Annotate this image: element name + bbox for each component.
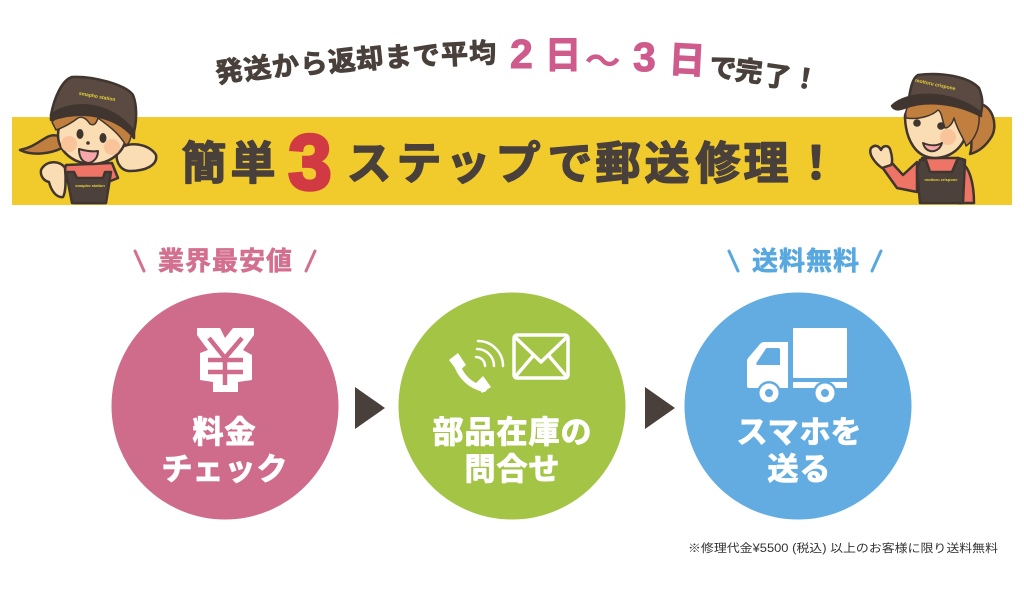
step 2 text: 部品在庫の xyxy=(432,407,592,452)
step 3 text: スマホを xyxy=(736,407,862,452)
cap xyxy=(51,77,136,132)
subtitle: curved text: 日 xyxy=(667,29,707,85)
ponytail xyxy=(970,104,994,154)
character: right staff xyxy=(870,74,994,203)
arrow 1 xyxy=(355,387,385,429)
banner background xyxy=(12,117,1012,205)
hair xyxy=(906,98,979,146)
subtitle: curved text: ～ xyxy=(583,32,622,86)
face xyxy=(58,106,126,164)
character: left staff xyxy=(20,77,156,203)
panel: step 1 price check: チェック xyxy=(162,444,288,489)
icon: envelope xyxy=(514,335,568,378)
body xyxy=(62,163,118,203)
mouth xyxy=(923,143,942,151)
hair xyxy=(52,114,132,144)
ponytail xyxy=(20,135,62,154)
icon: yen xyxy=(197,328,254,392)
cap xyxy=(908,74,982,113)
subtitle: curved text: 3 xyxy=(633,34,656,80)
panel: step 2 parts inquiry xyxy=(398,292,626,520)
mouth xyxy=(79,149,98,163)
subtitle: curved text: で完了！ xyxy=(708,45,822,98)
cheeks xyxy=(61,136,120,155)
cheek xyxy=(940,129,956,145)
icon: truck xyxy=(747,328,847,405)
eyes xyxy=(913,119,945,130)
step 1 text: 料金 xyxy=(192,407,256,452)
subtitle: curved text: 日 xyxy=(544,25,582,79)
apron logo: mottoru crispone xyxy=(925,177,958,182)
face xyxy=(905,101,967,158)
apron logo: smapho station xyxy=(75,183,105,188)
panel: step 2 parts inquiry: 問合せ xyxy=(464,444,560,489)
banner title: ステップで郵送修理！ xyxy=(346,127,839,192)
arrow 2 xyxy=(645,387,675,429)
banner title xyxy=(181,118,839,206)
icon: phone xyxy=(449,341,503,393)
cap logo: smapho station xyxy=(78,91,116,103)
subtitle: curved text: 2 xyxy=(510,31,533,77)
subtitle: curved text xyxy=(212,25,822,98)
left fist and arm xyxy=(41,162,66,197)
shirt and apron xyxy=(922,158,958,176)
banner title: 3 xyxy=(288,118,332,206)
right fist xyxy=(117,144,156,171)
panel: step 3 send smartphone: 送る xyxy=(768,444,830,489)
panel: step 1 price check xyxy=(112,292,338,520)
label: free shipping: 送料無料 xyxy=(752,241,859,278)
eyes xyxy=(76,129,106,145)
hand xyxy=(870,146,892,168)
cap logo: mottoru crispone xyxy=(914,78,956,92)
banner title: 簡単 xyxy=(181,127,276,192)
footnote: ※修理代金¥5500 (税込) 以上のお客様に限り送料無料 xyxy=(688,541,999,555)
subtitle: curved text: 発送から返却まで平均 xyxy=(212,31,497,91)
panel: step 3 send smartphone xyxy=(684,292,912,520)
sleeves xyxy=(882,162,917,192)
label: lowest price: 業界最安値 xyxy=(158,241,292,278)
